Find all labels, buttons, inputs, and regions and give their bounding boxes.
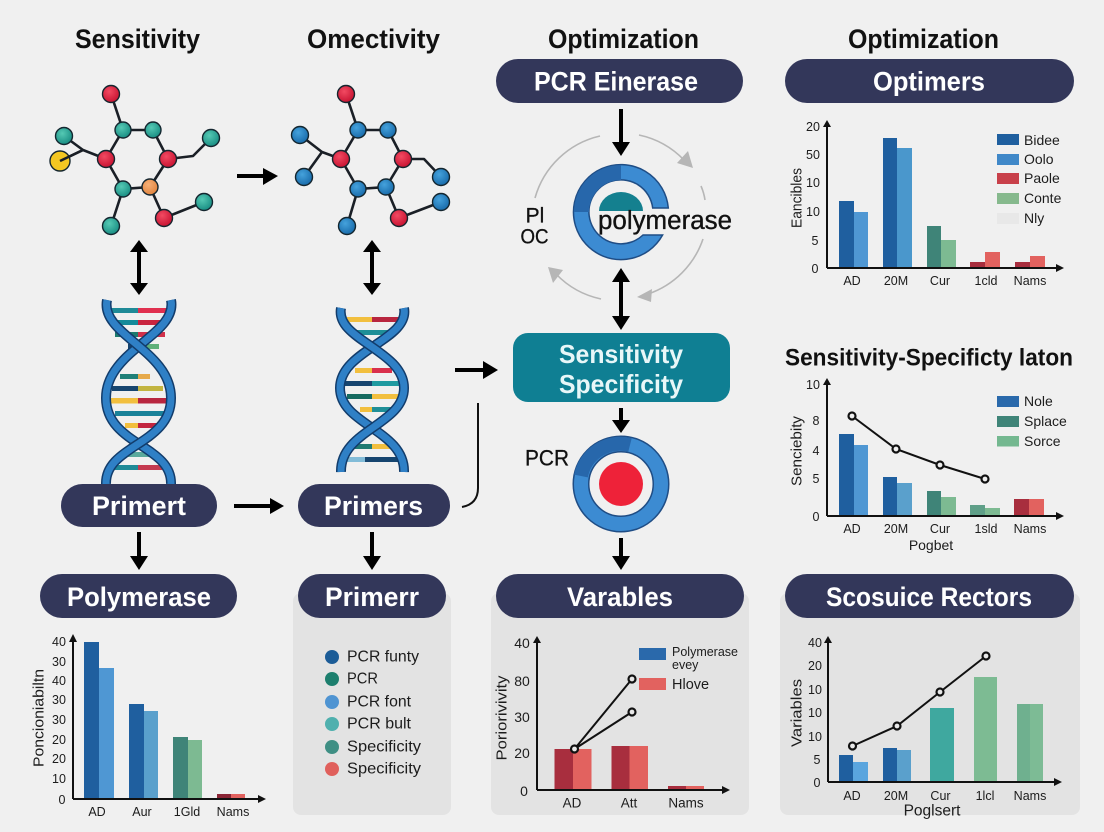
chart: Polymerase bars: 0	[59, 793, 66, 807]
pill: Polymerase	[40, 574, 237, 618]
chart: Optimers bars: 10	[806, 176, 820, 190]
chart: Sensitivity line and bars: 4	[813, 444, 820, 458]
legend: Conte	[1024, 190, 1062, 206]
panel: Scosuice Rectors: 40	[808, 636, 822, 650]
bars	[839, 138, 1045, 268]
arrow: double middle	[363, 240, 381, 295]
trend line	[849, 652, 990, 750]
box: Sensitivity Specificity: Sensitivity	[559, 339, 684, 369]
heading: Sensitivity-Specificty laton: Sensitivity-Specificty laton	[785, 344, 1073, 372]
icon: polymerase ring	[573, 165, 732, 260]
label: Pl OC	[520, 204, 548, 248]
heading: Optimization right: Optimization	[848, 24, 999, 54]
chart: Optimers bars: 0	[812, 262, 819, 276]
trend lines	[571, 676, 636, 752]
chart: Sensitivity line and bars: Cur	[930, 522, 950, 536]
panel: Varables: 40	[514, 635, 530, 651]
legend list	[325, 648, 421, 778]
pill: Optimers: Optimers	[873, 66, 985, 96]
legend list: PCR funty	[347, 648, 419, 666]
chart: Optimers bars: 5	[812, 234, 819, 248]
pill: PCR Einerase	[496, 59, 743, 103]
legend: Paole	[1024, 170, 1060, 186]
panel: Varables	[491, 574, 749, 815]
label: PCR: PCR	[525, 446, 569, 470]
panel: Scosuice Rectors: 0	[814, 776, 821, 790]
DNA helix: right	[340, 308, 404, 472]
box: Sensitivity Specificity	[513, 333, 730, 402]
legend	[997, 393, 1067, 449]
icon: polymerase ring: polymerase	[598, 207, 732, 235]
legend: Bidee	[1024, 132, 1060, 148]
panel: Scosuice Rectors: Nams	[1014, 789, 1046, 803]
chart: Polymerase bars: 1Gld	[174, 805, 200, 819]
arrow: into Sensitivity box	[455, 361, 498, 379]
chart: Optimers bars: AD	[843, 274, 861, 288]
panel: Scosuice Rectors: 20	[808, 659, 822, 673]
chart: Optimers bars: Nams	[1014, 274, 1046, 288]
chart: Polymerase bars: 20	[52, 752, 66, 766]
panel: Varables: Att	[621, 796, 637, 810]
DNA helix: left	[106, 300, 171, 484]
panel: Scosuice Rectors: 10	[808, 706, 822, 720]
panel: Varables: 30	[514, 709, 530, 725]
pill: Scosuice Rectors	[785, 574, 1074, 618]
pill: Scosuice Rectors: Scosuice Rectors	[826, 582, 1032, 612]
chart: Optimers bars: 20M	[884, 274, 908, 288]
chart: Optimers bars: 10	[806, 205, 820, 219]
chart: Polymerase bars: 30	[52, 693, 66, 707]
chart: Sensitivity line and bars: AD	[843, 522, 861, 536]
panel: Scosuice Rectors: Poglsert	[904, 802, 961, 820]
arrow: double left	[130, 240, 148, 295]
legend	[997, 132, 1062, 226]
arrow: down to polymerase ring	[612, 109, 630, 156]
panel: Scosuice Rectors	[780, 574, 1080, 820]
chart: Polymerase bars	[30, 634, 266, 819]
panel: Varables: 20	[514, 745, 530, 761]
label: Pl OC: OC	[520, 226, 548, 248]
bars	[839, 434, 1044, 516]
legend list: PCR	[347, 670, 378, 688]
panel: Scosuice Rectors: 10	[808, 730, 822, 744]
chart: Optimers bars: Cur	[930, 274, 950, 288]
chart: Polymerase bars: 30	[52, 713, 66, 727]
label: Pl OC: Pl	[526, 204, 544, 228]
chart: Polymerase bars: 30	[52, 655, 66, 669]
arrow: molecule to molecule	[237, 168, 278, 185]
panel: Scosuice Rectors: Variables	[788, 679, 806, 747]
chart: Polymerase bars: Nams	[217, 805, 249, 819]
cycle: grey arrows around polymerase	[535, 135, 705, 302]
panel: Varables: Nams	[668, 796, 704, 810]
panel: Scosuice Rectors: 10	[808, 683, 822, 697]
chart: Sensitivity line and bars: Nams	[1014, 522, 1046, 536]
chart: Sensitivity line and bars: 20M	[884, 522, 908, 536]
panel: Scosuice Rectors: 1lcl	[976, 789, 994, 803]
icon: PCR target ring	[581, 444, 661, 524]
pill: Primert: Primert	[92, 491, 186, 521]
pill: Varables	[496, 574, 744, 618]
legend: Hlove	[672, 677, 709, 693]
chart: Sensitivity line and bars: 10	[806, 378, 820, 392]
panel: Primerr legend	[293, 574, 451, 815]
pill: PCR Einerase: PCR Einerase	[534, 66, 698, 96]
bars	[84, 642, 245, 799]
legend list: Specificity	[347, 760, 421, 778]
panel: Varables: AD	[563, 796, 582, 810]
panel: Varables: 80	[514, 673, 530, 689]
panel: Scosuice Rectors: 20M	[884, 789, 908, 803]
arrow: box to PCR ring	[612, 408, 630, 433]
heading: Omectivity: Omectivity	[307, 24, 440, 54]
legend: Sorce	[1024, 433, 1061, 449]
chart: Optimers bars: Eancibles	[788, 168, 806, 228]
legend: evey	[672, 658, 699, 672]
legend: Polymerase	[672, 645, 738, 659]
chart: Polymerase bars: 40	[52, 635, 66, 649]
connector: Primers to box	[462, 403, 478, 507]
chart: Polymerase bars: Aur	[132, 805, 152, 819]
pill: Primers	[298, 484, 450, 527]
legend list: PCR font	[347, 694, 412, 710]
pill: Optimers	[785, 59, 1074, 103]
legend	[639, 645, 738, 693]
trend line	[848, 412, 988, 482]
legend: Splace	[1024, 413, 1067, 429]
pill: Varables: Varables	[567, 582, 673, 612]
arrow: Primert to Primers	[234, 498, 284, 514]
chart: Sensitivity line and bars: 8	[813, 414, 820, 428]
chart: Sensitivity line and bars: Senciebity	[788, 416, 806, 486]
panel: Scosuice Rectors: Cur	[930, 789, 951, 803]
chart: Polymerase bars: 10	[52, 772, 66, 786]
chart: Polymerase bars: AD	[88, 805, 106, 819]
chart: Sensitivity line and bars: 1sld	[975, 522, 998, 536]
chart: Sensitivity line and bars: 0	[813, 510, 820, 524]
bars	[839, 677, 1043, 782]
pill: Primers: Primers	[324, 491, 423, 521]
arrow: PCR ring down	[612, 538, 630, 570]
pill: Polymerase: Polymerase	[67, 582, 211, 612]
panel: Varables: 0	[520, 783, 528, 799]
chart: Polymerase bars: Poncioniabiltn	[30, 669, 48, 767]
chart: Optimers bars: 1cld	[975, 274, 998, 288]
pill: Primerr: Primerr	[325, 582, 419, 612]
legend: Nole	[1024, 393, 1053, 409]
molecule: left teal network	[50, 86, 220, 234]
chart: Sensitivity line and bars: 5	[813, 472, 820, 486]
molecule: right blue network	[292, 86, 450, 234]
legend list: PCR bult	[347, 716, 412, 732]
panel: Varables: Poriorivivity	[494, 675, 510, 760]
chart: Optimers bars	[788, 120, 1064, 288]
pill: Primerr	[298, 574, 446, 618]
arrow: Primers down	[363, 532, 381, 570]
pill: Primert	[61, 484, 217, 527]
panel: Scosuice Rectors: 5	[814, 753, 821, 767]
chart: Sensitivity line and bars	[788, 378, 1067, 553]
chart: Polymerase bars: 20	[52, 733, 66, 747]
panel: Scosuice Rectors: AD	[843, 789, 861, 803]
chart: Optimers bars: 20	[806, 120, 820, 134]
chart: Polymerase bars: 40	[52, 674, 66, 688]
box: Sensitivity Specificity: Specificity	[559, 369, 684, 399]
chart: Sensitivity line and bars: Pogbet	[909, 537, 953, 553]
legend: Oolo	[1024, 151, 1054, 167]
bars	[554, 746, 704, 790]
heading: Sensitivity: Sensitivity	[75, 24, 200, 54]
legend list: Specificity	[347, 738, 421, 756]
arrow: double polymerase to box	[612, 268, 630, 330]
arrow: Primert down	[130, 532, 148, 570]
chart: Optimers bars: 50	[806, 148, 820, 162]
legend: Nly	[1024, 210, 1044, 226]
heading: Optimization centre: Optimization	[548, 24, 699, 54]
